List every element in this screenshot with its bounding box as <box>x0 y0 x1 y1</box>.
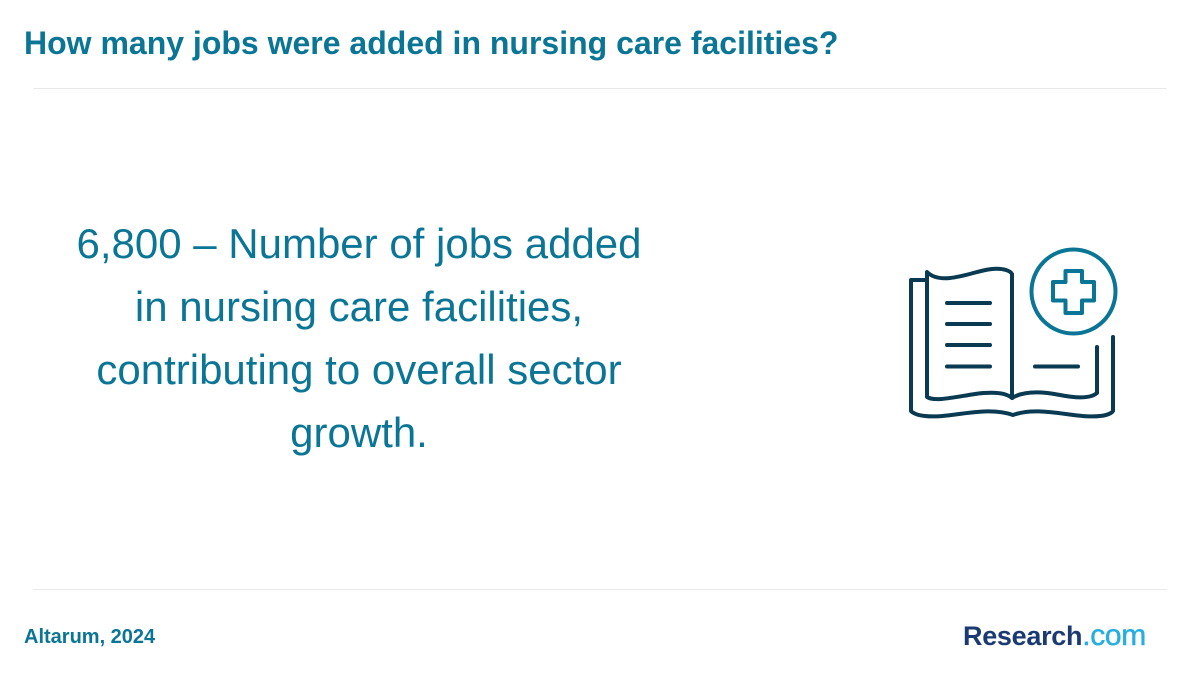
main statement: 6,800 – Number of jobs added <box>76 220 642 267</box>
title: How many jobs were added in nursing care facilities? <box>24 25 838 61</box>
main statement: contributing to overall sector <box>96 346 622 393</box>
main statement <box>76 220 642 456</box>
main statement: in nursing care facilities, <box>135 283 583 330</box>
logo: Research.com: Research.com <box>963 619 1146 652</box>
source: Altarum, 2024 <box>24 626 155 648</box>
main statement: growth. <box>290 409 428 456</box>
